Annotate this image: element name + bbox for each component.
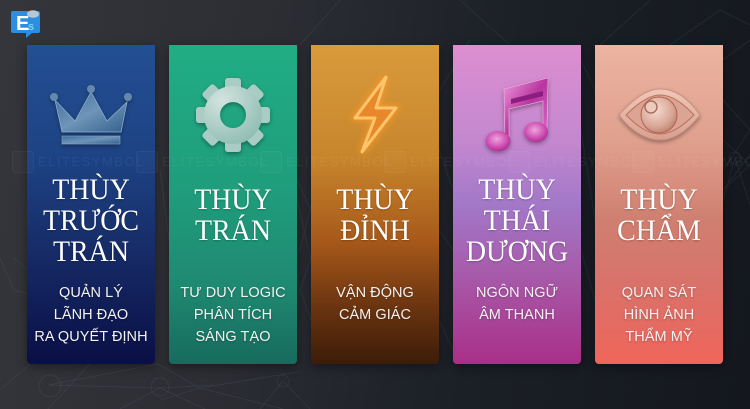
heading: THÙY <box>194 183 272 216</box>
heading <box>617 183 701 247</box>
panel: thùy đỉnh <box>311 45 439 364</box>
heading: THÙY <box>620 183 698 216</box>
functions: VẬN ĐỘNG <box>336 285 414 301</box>
functions: NGÔN NGỮ <box>476 285 558 301</box>
logo: E <box>16 13 29 35</box>
functions: QUAN SÁT <box>622 285 696 301</box>
heading: DƯƠNG <box>466 235 568 268</box>
heading: THÁI <box>484 204 550 237</box>
functions: LÃNH ĐẠO <box>54 307 128 323</box>
heading: TRÁN <box>195 214 271 247</box>
functions: CẢM GIÁC <box>339 307 411 323</box>
icon: music note <box>486 78 548 151</box>
functions: SÁNG TẠO <box>195 329 271 345</box>
panel: thùy trước trán <box>27 45 155 364</box>
heading <box>466 173 568 268</box>
panel: thùy chẩm <box>595 45 723 364</box>
functions <box>34 284 148 345</box>
heading: THÙY <box>336 183 414 216</box>
functions: RA QUYẾT ĐỊNH <box>34 329 148 345</box>
functions <box>622 284 696 345</box>
panel: thùy thái dương <box>453 45 581 364</box>
watermark 3: ELITESYMBOL <box>286 154 393 169</box>
heading <box>43 173 139 268</box>
heading: CHẨM <box>617 214 701 247</box>
logo: s <box>28 21 34 33</box>
watermark 2 <box>136 151 269 173</box>
logo <box>11 10 40 38</box>
functions <box>476 284 558 323</box>
heading: THÙY <box>478 173 556 206</box>
functions: THẨM MỸ <box>625 329 693 345</box>
heading <box>336 183 414 247</box>
watermark 2: ELITESYMBOL <box>162 154 269 169</box>
icon: eye <box>619 89 700 140</box>
functions: HÌNH ẢNH <box>624 307 694 323</box>
heading: ĐỈNH <box>340 214 410 247</box>
watermark 3 <box>260 151 393 173</box>
functions: PHÂN TÍCH <box>194 307 272 323</box>
functions: ÂM THANH <box>479 307 555 323</box>
heading <box>194 183 272 247</box>
heading: TRÁN <box>53 235 129 268</box>
watermark 1: ELITESYMBOL <box>38 154 145 169</box>
icon: lightning bolt <box>355 77 396 152</box>
functions: QUẢN LÝ <box>59 285 123 301</box>
watermark 4: ELITESYMBOL <box>410 154 517 169</box>
heading: THÙY <box>52 173 130 206</box>
functions: TƯ DUY LOGIC <box>180 285 286 301</box>
icon: crown <box>50 85 132 144</box>
watermark 1 <box>12 151 145 173</box>
watermark 5: ELITESYMBOL <box>534 154 641 169</box>
functions <box>336 284 414 323</box>
panel: thùy trán <box>169 45 297 364</box>
icon: gear <box>196 78 270 152</box>
functions <box>180 285 286 345</box>
heading: TRƯỚC <box>43 204 139 237</box>
watermark 4 <box>384 151 517 173</box>
